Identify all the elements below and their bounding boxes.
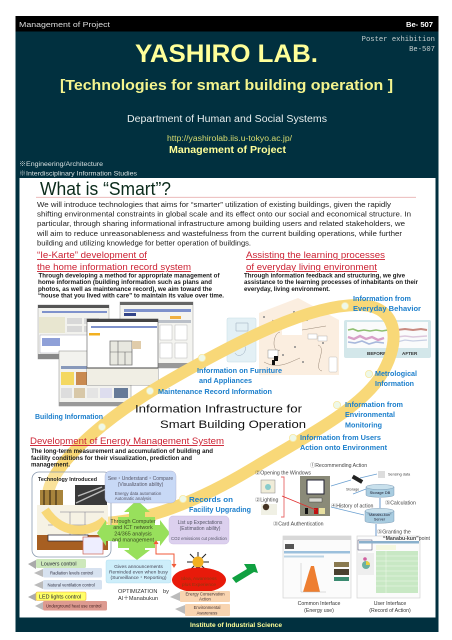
caption: user interface: User Interface <box>374 601 406 607</box>
info label: environmental monitoring <box>345 400 403 430</box>
learning description <box>244 273 419 293</box>
energy description: management. <box>31 462 70 469</box>
control labels: LED lights control <box>39 594 81 600</box>
panel: technology introduced <box>32 472 111 557</box>
callout: idea awareness: Idea, Awareness <box>181 576 217 582</box>
ie-karte description <box>38 273 224 299</box>
intro text: building and utilizing knowledge for better operation of buildings. <box>37 238 251 247</box>
panel: surveillance: (Surveillance・Reporting) <box>110 575 167 581</box>
chart: before and after behavior <box>344 320 431 358</box>
optimization note: by <box>163 589 169 595</box>
heading: ie-karte <box>37 250 191 272</box>
screenshot: common interface <box>283 536 351 598</box>
intro text: will aim to reduce unreasonableness and wastefulness from the current building operations, while further <box>36 229 403 238</box>
flow diagram: ④History of action <box>331 502 373 510</box>
control labels: Radiation levels control <box>50 571 93 576</box>
info label: building information: Building Information <box>35 412 103 421</box>
flow diagram: ③Card Authentication <box>273 520 324 528</box>
info label: furniture and appliances: and Appliances <box>199 376 252 385</box>
ie-karte description: “house that you lived with care” to maintain its value over time. <box>38 292 224 299</box>
network text: Through Computer <box>110 519 156 525</box>
heading: energy management: Development of Energy Management System <box>30 435 224 446</box>
center title <box>135 404 306 431</box>
screenshot: user interface <box>357 536 420 598</box>
url: http://yashirolab.iis.u-tokyo.ac.jp/ <box>167 134 293 143</box>
info label: facility upgrading <box>189 495 251 514</box>
learning description: everyday, living environment. <box>244 286 330 293</box>
screenshot: record overview <box>38 305 109 359</box>
info label: users action <box>300 433 388 452</box>
info label: facility upgrading: Facility Upgrading <box>189 505 251 514</box>
caption: user interface <box>369 601 411 614</box>
white content panel <box>20 178 436 618</box>
icon: furniture box <box>227 318 256 362</box>
flow diagram: Sensing data <box>388 472 411 476</box>
screenshot: floor plan <box>87 319 158 385</box>
panel: environmental awareness: Awareness <box>197 610 217 616</box>
energy description: The long-term measurement and accumulation of building and <box>31 448 213 455</box>
flow diagram: ⑤Granting the <box>377 528 411 536</box>
optimization note: AI＋Manabukun <box>118 595 158 602</box>
center title: Information Infrastructure for <box>135 404 302 416</box>
chart: before and after behavior: AFTER <box>402 351 418 356</box>
footer: Institute of Industrial Science <box>190 622 282 629</box>
categories: ※Engineering/Architecture <box>19 161 104 168</box>
panel: technology introduced: Technology Introduced <box>38 477 97 483</box>
panel: energy conservation: Energy Conservation <box>185 592 225 596</box>
panel: environmental awareness: Environmental <box>194 605 220 610</box>
information ring <box>48 305 394 523</box>
control labels: Underground heat use control <box>46 604 101 609</box>
heading: ie-karte: the home information record system <box>37 262 191 272</box>
info label: users action: Action onto Environment <box>300 443 388 452</box>
panel: estimation: List up Expectations <box>178 520 223 526</box>
panel: visualization <box>105 471 176 503</box>
categories <box>19 161 137 178</box>
heading: assisting learning <box>246 250 386 272</box>
panel: energy conservation: Action <box>199 596 211 602</box>
intro text: shifting environmental constraints in global scale and its effect onto our social and economical structure. In <box>37 210 411 219</box>
caption: common interface <box>298 601 340 614</box>
optimization note <box>118 589 169 602</box>
energy description <box>31 448 213 469</box>
center title: Smart Building Operation <box>160 419 306 431</box>
flow diagram: ②Lighting <box>255 496 278 504</box>
icon: house with appliances <box>259 298 339 375</box>
network text <box>110 519 156 544</box>
flow diagram: ⑤Calculation <box>385 498 416 506</box>
control labels: Natural ventilation control <box>48 583 95 588</box>
top bar: Management of Project <box>19 20 111 29</box>
info label: metrological <box>375 369 417 388</box>
info label: metrological: Information <box>375 379 414 388</box>
info label: maintenance: Maintenance Record Information <box>158 387 272 396</box>
ie-karte description: home information (building information such as plans and <box>38 279 212 286</box>
info label: environmental monitoring: Monitoring <box>345 420 382 430</box>
control labels <box>28 559 107 610</box>
info label: environmental monitoring: Environmental <box>345 410 395 419</box>
flow diagram: ①Recommending Action <box>310 461 367 469</box>
callout: idea awareness: plus Experience <box>182 582 216 588</box>
intro text: We will introduce technologies that aims for “smarter” utilization of existing buildings, given the rapidly <box>37 200 391 209</box>
network text: and management <box>112 538 154 544</box>
top bar <box>16 16 438 32</box>
panel: visualization: See・Understand・Compare <box>108 476 173 482</box>
intro text: particular, through sharing informational infrastructure among building users and related stakeholders, we <box>37 219 405 228</box>
poster exhibition note: Poster exhibition <box>362 36 435 44</box>
categories: ※Interdisciplinary Information Studies <box>19 170 137 178</box>
info label: furniture and appliances: Information on Furniture <box>197 366 282 375</box>
ring nodes <box>98 302 373 503</box>
flow diagram: Storage <box>346 488 359 492</box>
heading: what is smart: What is “Smart”? <box>40 179 171 199</box>
caption: user interface: (Record of Action) <box>369 608 411 614</box>
flow diagram <box>255 461 431 542</box>
info label: everyday behavior <box>353 294 421 313</box>
icon: network arrows <box>97 500 170 560</box>
info label: everyday behavior: Information from <box>353 294 411 303</box>
network text: and ICT network <box>113 525 153 531</box>
optimization note: OPTIMIZATION <box>118 589 157 595</box>
flow diagram: Server <box>374 518 386 522</box>
caption: common interface: (Energy use) <box>304 608 334 614</box>
flow diagram: ②Opening the Windows <box>255 468 311 476</box>
section name: Management of Project <box>169 145 287 156</box>
ie-karte description: photos, as well as maintenance record), we aim toward the <box>38 286 212 293</box>
info label: metrological: Metrological <box>375 369 417 378</box>
arrow: feedback <box>154 541 176 567</box>
icon: light bulb <box>187 552 209 572</box>
panel: surveillance: Gives announcements <box>114 564 163 570</box>
flow diagram: Storage DB <box>370 490 391 495</box>
energy description: facility conditions for their visualization, prediction and <box>31 455 192 462</box>
panel: environmental awareness <box>175 604 230 616</box>
info label: facility upgrading: Records on <box>189 495 234 504</box>
panel: visualization: Automatic analysis <box>115 496 152 501</box>
screenshot: photo gallery <box>59 351 131 406</box>
control labels: Louvers control <box>41 562 76 568</box>
heading: assisting learning: Assisting the learning processes <box>246 250 386 260</box>
chart: before and after behavior: BEFORE <box>367 351 386 356</box>
panel: estimation <box>169 516 229 544</box>
caption: common interface: Common Interface <box>298 601 340 607</box>
learning description: assistance to the learning processes of inhabitants on their <box>244 279 419 286</box>
top bar: Be- 507 <box>406 20 433 29</box>
arrow: green to interfaces <box>232 564 258 583</box>
poster exhibition note: Be-507 <box>409 46 435 54</box>
heading: ie-karte: “Ie-Karte” development of <box>37 250 148 260</box>
info label: users action: Information from Users <box>300 433 381 442</box>
flow diagram: “Manabu-kun”point <box>383 536 431 542</box>
title: YASHIRO LAB. <box>135 40 318 68</box>
panel: energy conservation <box>170 591 230 602</box>
heading: assisting learning: of everyday living environment <box>246 262 378 272</box>
flow diagram: "Manabu-kun" <box>368 513 392 517</box>
ie-karte description: Through developing a method for appropriate management of <box>38 273 220 280</box>
subtitle: [Technologies for smart building operation ] <box>60 77 393 94</box>
network text: 24/365 analysis <box>114 532 152 538</box>
screenshot: drawings list <box>120 302 193 368</box>
info label: everyday behavior: Everyday Behavior <box>353 304 421 313</box>
panel: surveillance: Reminded even when busy <box>109 570 169 576</box>
department: Department of Human and Social Systems <box>127 114 327 125</box>
panel: visualization: Energy data automation <box>115 491 162 496</box>
info label: environmental monitoring: Information from <box>345 400 403 409</box>
info label: furniture and appliances <box>197 366 282 385</box>
intro text <box>36 200 411 247</box>
poster exhibition note <box>362 36 435 54</box>
panel: surveillance <box>106 560 171 583</box>
panel: visualization: (Visualization ability) <box>118 482 164 488</box>
panel: estimation: (Estimation ability) <box>180 526 221 532</box>
panel: estimation: CO2 emissions cut prediction <box>171 536 228 541</box>
learning description: Through information feedback and structuring, we give <box>244 273 405 280</box>
callout: idea awareness <box>172 568 226 592</box>
